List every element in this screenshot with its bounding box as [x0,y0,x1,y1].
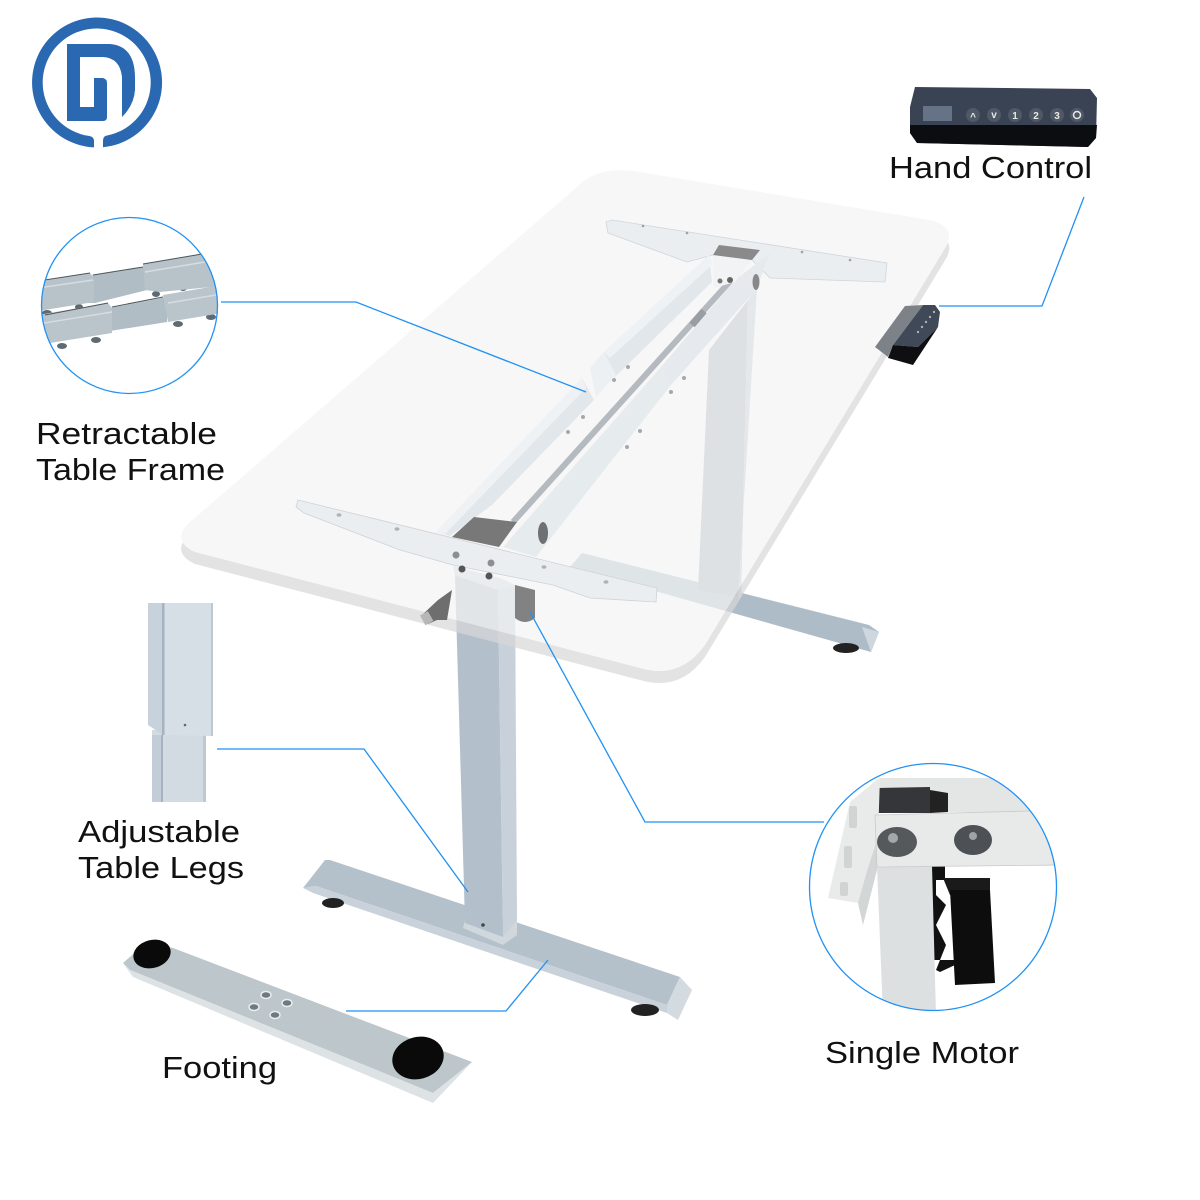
motor cable knob [420,590,452,625]
label: adjustable table legs [78,814,244,885]
retractable rail right [503,253,770,557]
left bracket [828,777,880,925]
hand control buttons: 3 [1054,111,1060,122]
circle: retractable table frame [38,218,222,394]
desk frame [296,220,887,625]
near mounting bracket [296,500,657,602]
table top [181,170,949,683]
footing underside image [123,936,472,1103]
far mounting bracket [606,220,887,282]
hand control buttons [966,108,1084,123]
motor block [452,517,517,547]
center block [713,255,752,288]
lead screw [513,278,733,522]
leader lines [217,197,1084,1011]
hand control buttons: v [991,110,997,121]
hand control buttons: ^ [970,112,976,123]
small hand control on desk edge [875,305,940,365]
label: adjustable table legs: Table Legs [78,850,244,885]
far leg and foot seen through the table [570,288,879,653]
label: retractable table frame: Table Frame [36,452,225,487]
near leg and foot beneath the table [303,575,692,1020]
label: retractable table frame: Retractable [36,416,217,451]
hand control [910,87,1097,147]
bracket bolts [452,552,494,580]
gray top plate [713,245,760,260]
near leg top [453,566,515,590]
label: hand control: Hand Control [889,150,1092,185]
motor cylinder and cables [932,866,995,985]
label: single motor: Single Motor [825,1035,1019,1070]
label: adjustable table legs: Adjustable [78,814,240,849]
motor cylinder [515,585,535,622]
circle: single motor [810,764,1060,1015]
adjustable leg detail image [148,603,213,802]
hand control buttons: 1 [1012,111,1018,122]
retractable rail left [436,255,713,536]
label: retractable table frame [36,416,225,487]
label: footing: Footing [162,1050,277,1085]
logo [32,17,162,147]
hand control buttons: 2 [1033,111,1039,122]
